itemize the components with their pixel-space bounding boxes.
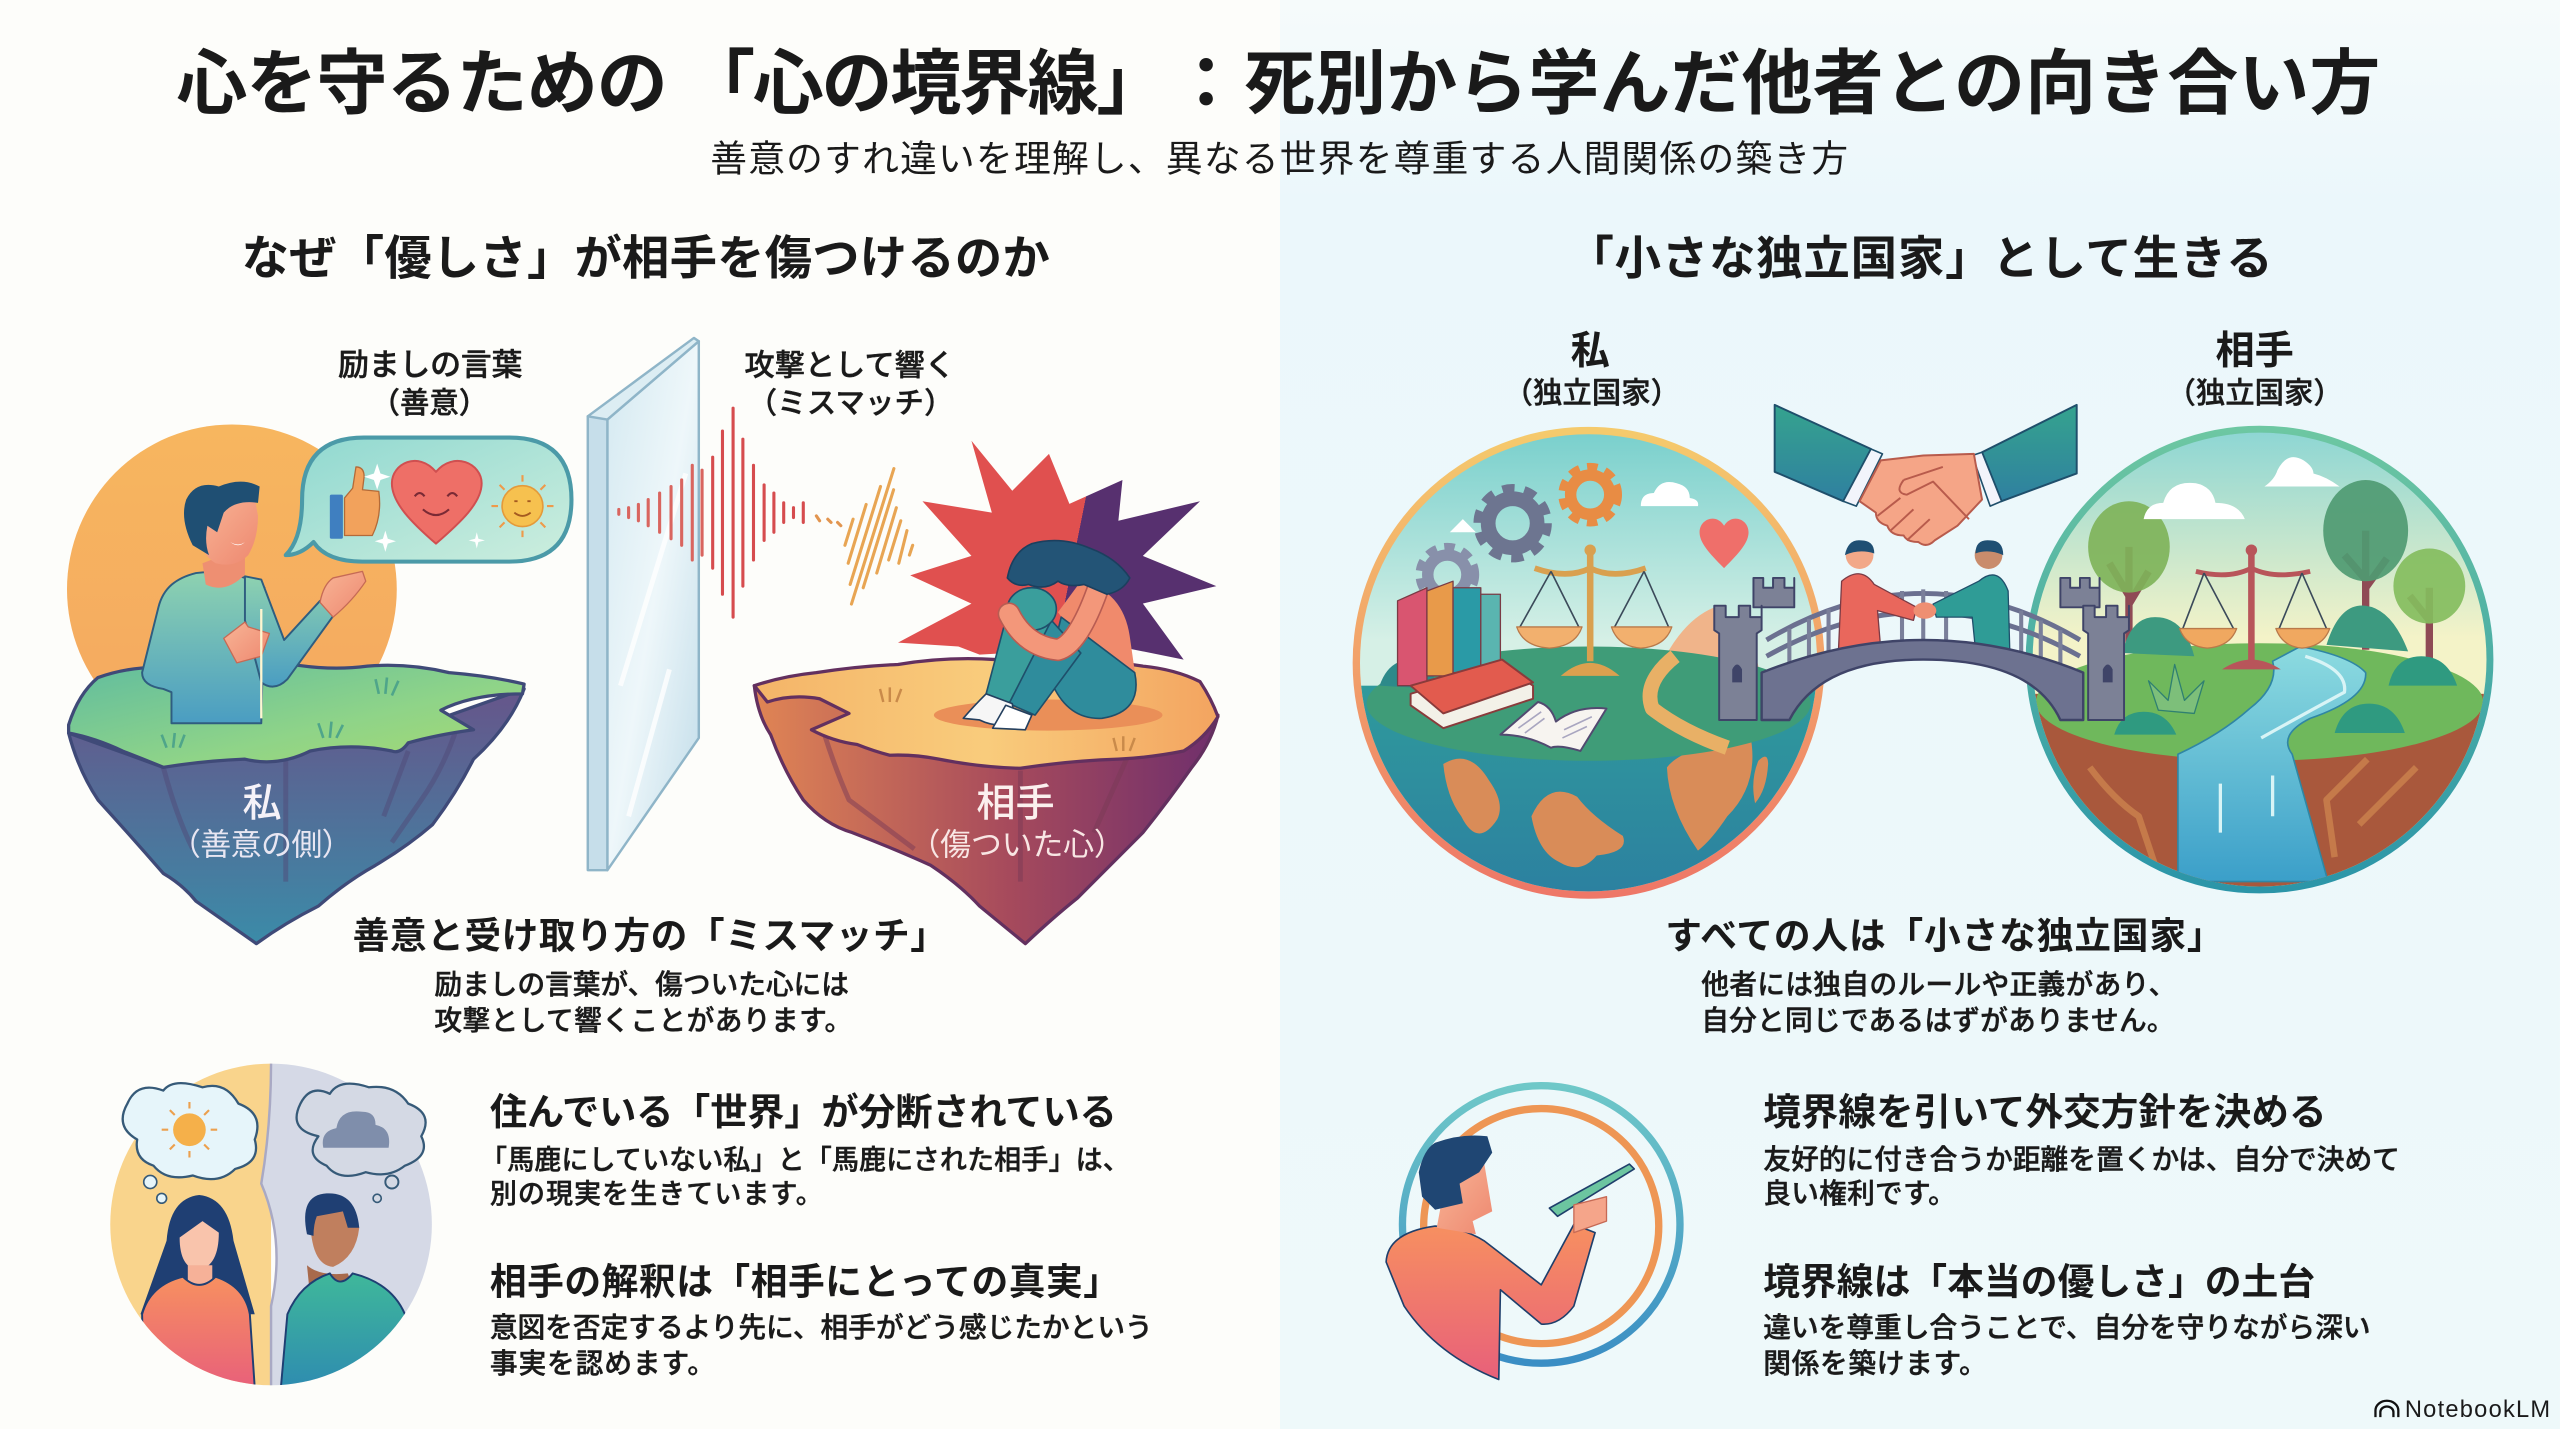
illustration: hurt person's island [754,441,1218,944]
text block: foreign policy [1763,1091,2400,1209]
text block: foreign policy: 境界線を引いて外交方針を決める [1763,1091,2326,1133]
island grass top [69,658,524,767]
label on hurt island: 相手 [976,782,1055,825]
caption: mismatch: 励ましの言葉が、傷ついた心には [434,969,849,1000]
text block: other's truth [490,1262,1153,1379]
label on my island: （善意の側） [170,827,353,862]
title: 心を守るための [176,45,668,124]
towers [1714,578,2129,720]
text block: true kindness [1763,1262,2371,1379]
caption: mismatch [353,916,947,1036]
caption: mismatch: 善意と受け取り方の「ミスマッチ」 [353,916,947,957]
text block: other's truth: 相手の解釈は「相手にとっての真実」 [490,1262,1120,1303]
label: encouraging words: （善意） [371,387,488,420]
text block: divided worlds: 「馬鹿にしていない私」と「馬鹿にされた相手」は、 [480,1144,1130,1175]
island rock [69,689,524,944]
heading: right: 「小さな独立国家」として生きる [1567,232,2273,284]
balance scale [1517,544,1672,676]
label: me nation: 私 [1571,330,1610,373]
text block: true kindness: 境界線は「本当の優しさ」の土台 [1763,1262,2315,1303]
arch deck [1762,640,2083,720]
caption: mismatch: 攻撃として響くことがあります。 [434,1005,852,1036]
caption: independent nation: 自分と同じであるはずがありません。 [1701,1005,2175,1036]
ground [1367,647,1811,761]
sound wave from wall to hurt person [619,408,913,617]
illustration: person drawing boundary [1386,1086,1680,1380]
person [1386,1224,1595,1380]
icon: smiling heart [392,461,482,544]
island rock [754,686,1218,944]
label on hurt island [909,782,1125,862]
logo: NotebookLM: NotebookLM [2405,1397,2550,1423]
text block: true kindness: 関係を築けます。 [1763,1348,1987,1379]
clouds [2144,457,2340,519]
boundary rings [1402,1086,1680,1363]
thought bubble: sun [123,1083,257,1203]
trees [2109,531,2429,661]
people [1838,540,2010,653]
icon: sun [491,475,554,537]
label: other nation: （独立国家） [2166,377,2343,410]
caption: independent nation [1665,916,2224,1036]
ground shadow [934,700,1162,731]
text block: other's truth: 意図を否定するより先に、相手がどう感じたかという [490,1312,1153,1343]
icon: handshake [1775,405,2077,545]
label: encouraging words: 励ましの言葉 [338,347,522,382]
glass wall [588,338,699,870]
title: 死別から学んだ他者との向き合い方 [1244,45,2380,124]
background: right panel [1280,0,2560,1429]
orange sun disc [67,424,397,754]
island sand top [754,659,1218,768]
gears [1421,469,1616,601]
text block: true kindness: 違いを尊重し合うことで、自分を守りながら深い [1763,1312,2371,1343]
label: other nation [2166,330,2343,410]
icon: thumbs up [330,467,380,539]
person [142,482,366,723]
illustration: my independent nation globe [1355,428,1829,906]
label: other nation: 相手 [2215,330,2294,373]
text block: divided worlds: 住んでいる「世界」が分断されている [490,1091,1117,1133]
caption: independent nation: 他者には独自のルールや正義があり、 [1701,969,2176,1000]
title: 「心の境界線」 [684,45,1167,124]
balance scale [2180,544,2330,669]
label: me nation: （独立国家） [1504,377,1680,410]
text block: divided worlds [480,1091,1130,1209]
stacked and open books [1411,660,1607,751]
label on my island [170,782,353,862]
illustration: two people, different worlds [98,1061,441,1388]
woman [140,1195,255,1314]
text block: divided worlds: 別の現実を生きています。 [490,1178,823,1209]
hurt person [963,541,1136,730]
label: echoes as attack [745,348,955,420]
bridge with castle towers and two people [1714,540,2129,720]
man [307,1265,349,1284]
burst [898,441,1216,660]
caption: independent nation: すべての人は「小さな独立国家」 [1665,916,2224,957]
heading: left: なぜ「優しさ」が相手を傷つけるのか [242,232,1050,285]
text block: foreign policy: 良い権利です。 [1763,1178,1956,1209]
bushes [2122,605,2408,656]
cloud and heart [1450,482,1749,568]
label: echoes as attack: （ミスマッチ） [748,387,953,420]
label on my island: 私 [242,782,282,825]
pen and hand [1549,1164,1634,1216]
label: echoes as attack: 攻撃として響く [745,348,955,382]
continents [1443,735,1768,867]
label: encouraging words [338,347,522,420]
illustration: my island with speaker [67,424,524,944]
subtitle: 善意のすれ違いを理解し、異なる世界を尊重する人間関係の築き方 [710,138,1848,179]
title: ： [1171,45,1242,124]
railings [1767,593,2080,656]
label: me nation [1504,330,1680,410]
river and waterfall [2178,647,2366,882]
text block: foreign policy: 友好的に付き合うか距離を置くかは、自分で決めて [1763,1144,2400,1175]
speech bubble with encouragement icons [286,438,571,562]
distant hill [1668,608,1758,667]
books upright [1398,581,1500,686]
label on hurt island: （傷ついた心） [909,827,1125,862]
illustration: other's independent nation [2024,424,2498,906]
text block: other's truth: 事実を認めます。 [490,1348,715,1379]
title [176,45,2380,124]
thought bubble: cloud [297,1084,426,1202]
